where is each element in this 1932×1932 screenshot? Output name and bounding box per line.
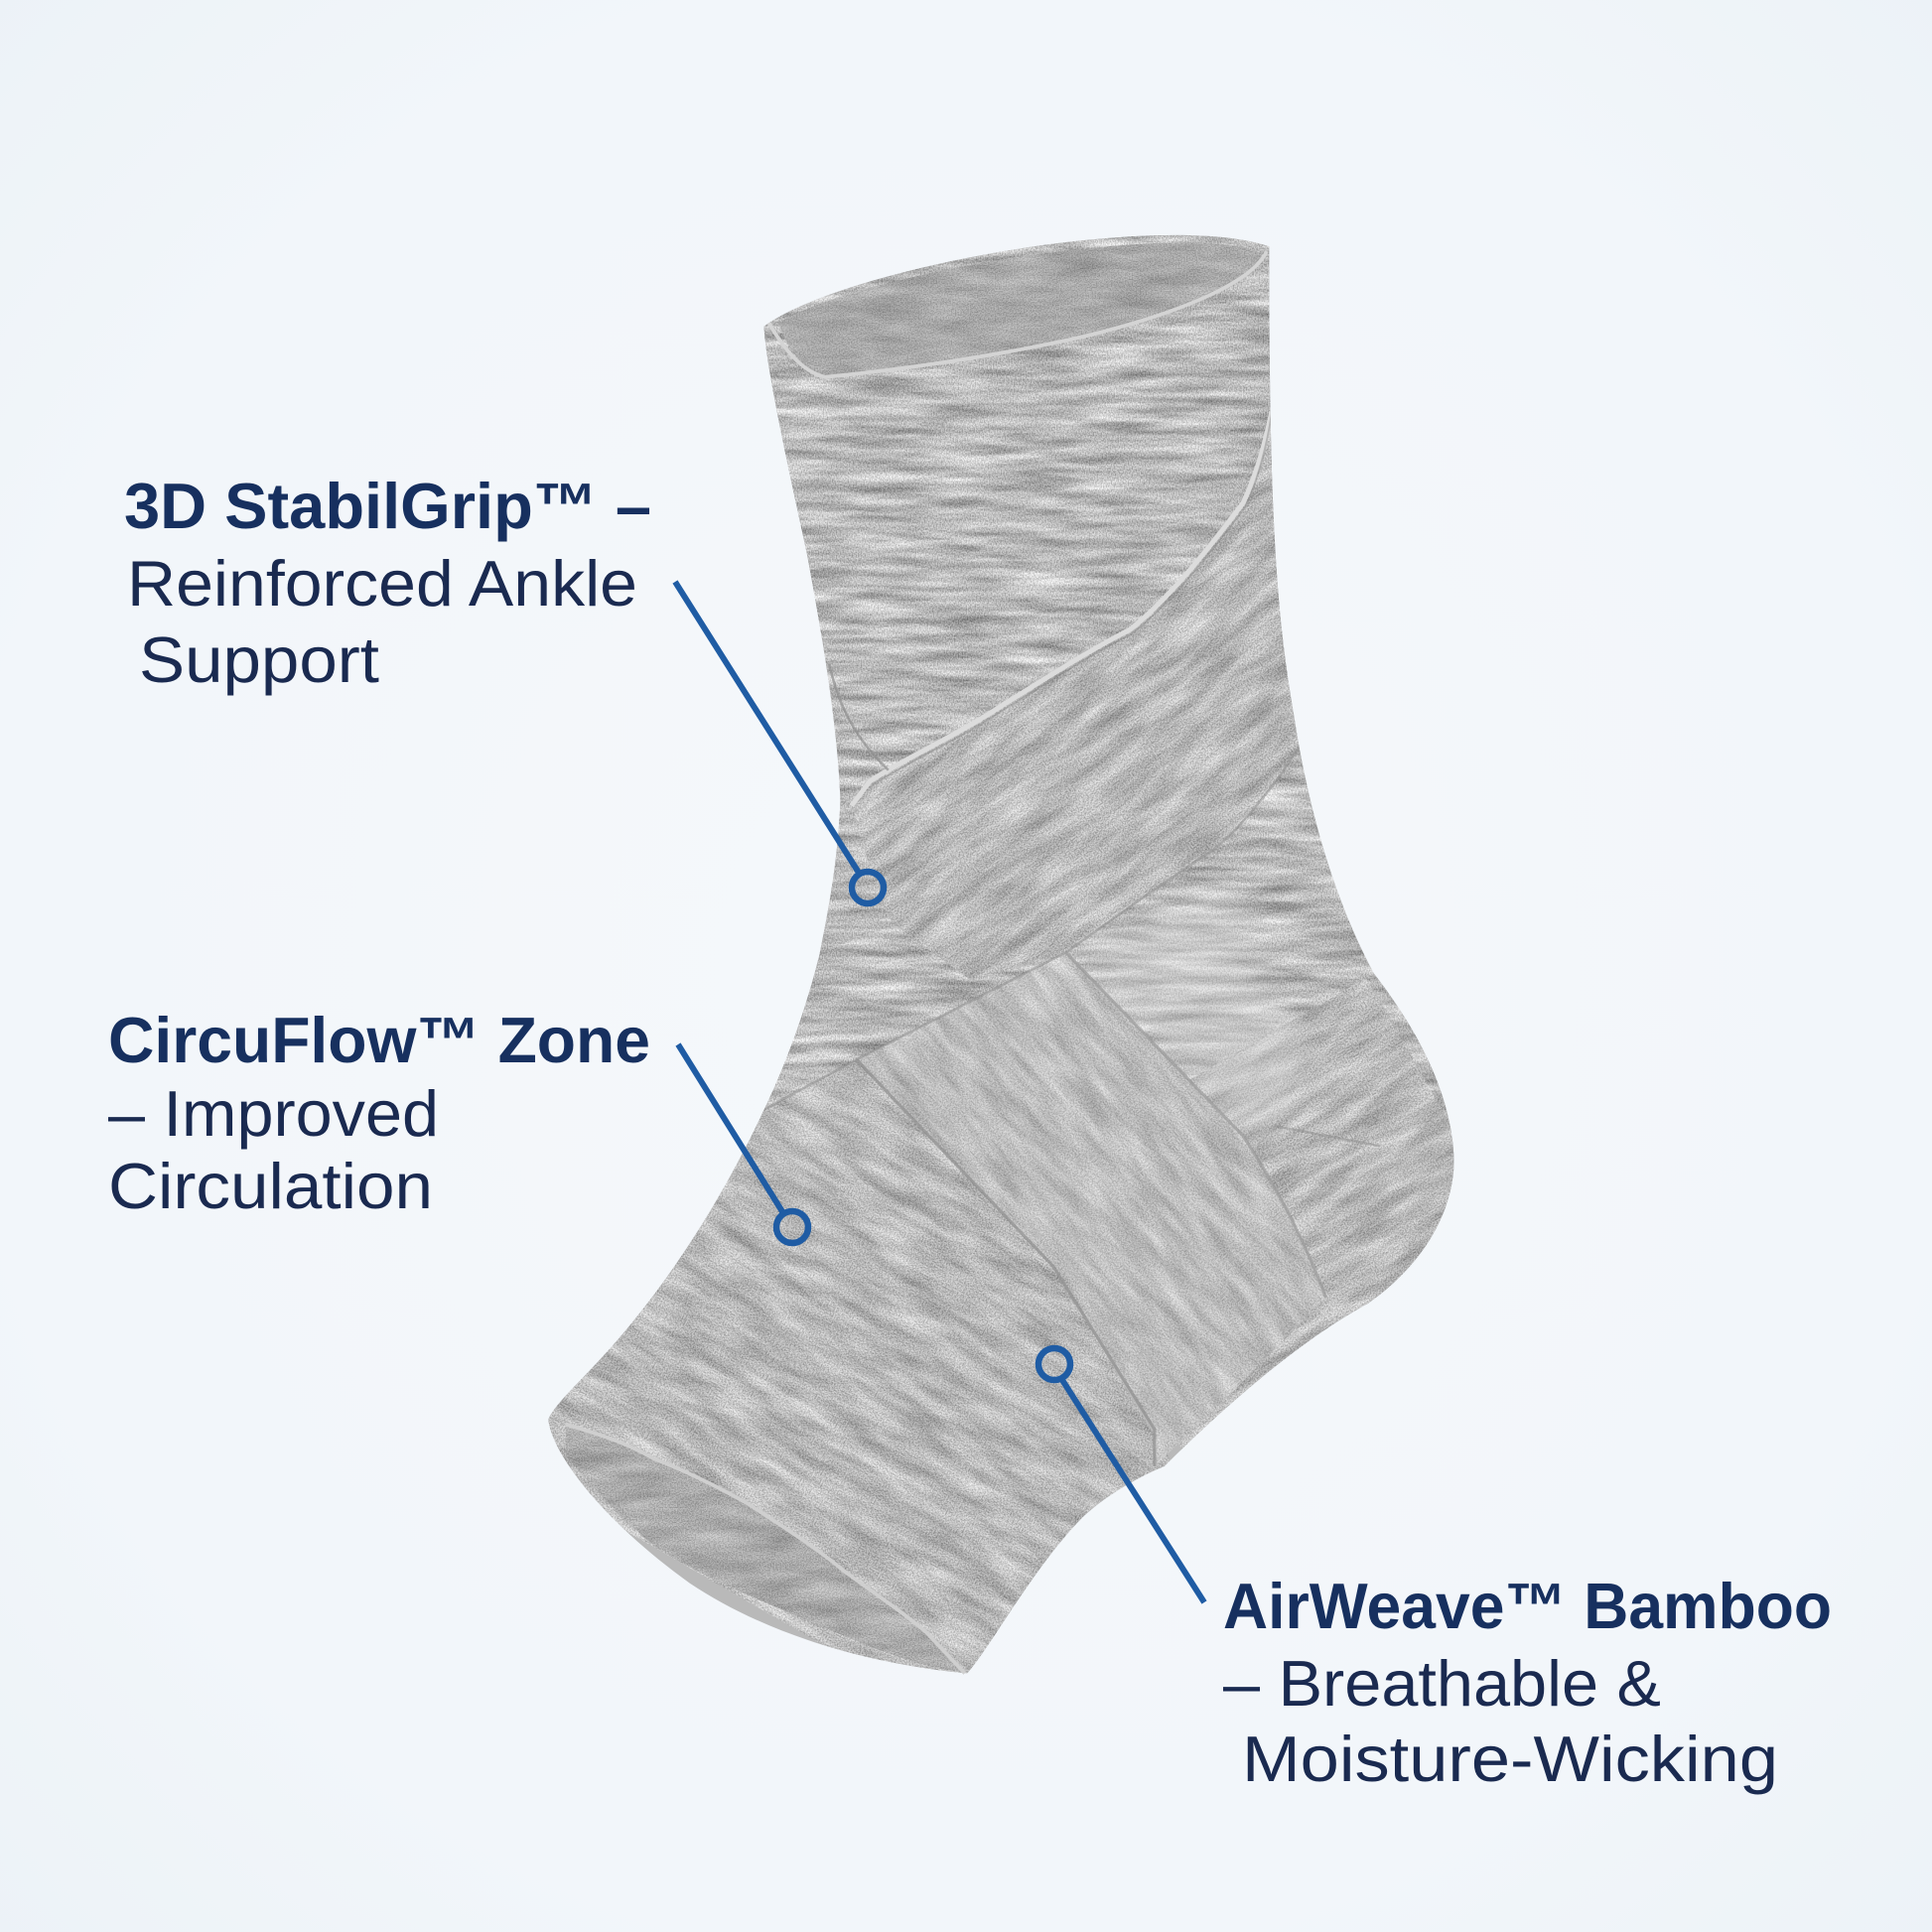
callout: CircuFlow Zone xyxy=(108,1004,808,1243)
label: 3D StabilGrip: Support xyxy=(139,623,379,696)
callout: AirWeave Bamboo xyxy=(1038,1348,1832,1795)
label: AirWeave Bamboo: – Breathable & xyxy=(1223,1647,1661,1720)
pointer line: CircuFlow Zone xyxy=(678,1044,808,1243)
label: AirWeave Bamboo xyxy=(1223,1570,1832,1795)
pointer line: AirWeave Bamboo xyxy=(1038,1348,1204,1602)
strap seam lines xyxy=(762,412,1380,1466)
ankle brace product illustration xyxy=(548,234,1453,1674)
label: 3D StabilGrip xyxy=(124,470,651,696)
label: AirWeave Bamboo: AirWeave™ Bamboo xyxy=(1223,1570,1832,1642)
label: 3D StabilGrip: 3D StabilGrip™ – xyxy=(124,470,651,542)
label: 3D StabilGrip: Reinforced Ankle xyxy=(127,547,637,620)
pointer line: 3D StabilGrip xyxy=(675,582,884,903)
callout: 3D StabilGrip xyxy=(124,470,884,903)
label: CircuFlow Zone: – Improved xyxy=(108,1077,439,1150)
label: CircuFlow Zone: CircuFlow™ Zone xyxy=(108,1004,650,1076)
toe opening xyxy=(566,1423,966,1674)
label: CircuFlow Zone: Circulation xyxy=(108,1150,433,1222)
label: CircuFlow Zone xyxy=(108,1004,650,1222)
label: AirWeave Bamboo: Moisture-Wicking xyxy=(1242,1723,1778,1795)
sock top opening xyxy=(767,242,1269,379)
